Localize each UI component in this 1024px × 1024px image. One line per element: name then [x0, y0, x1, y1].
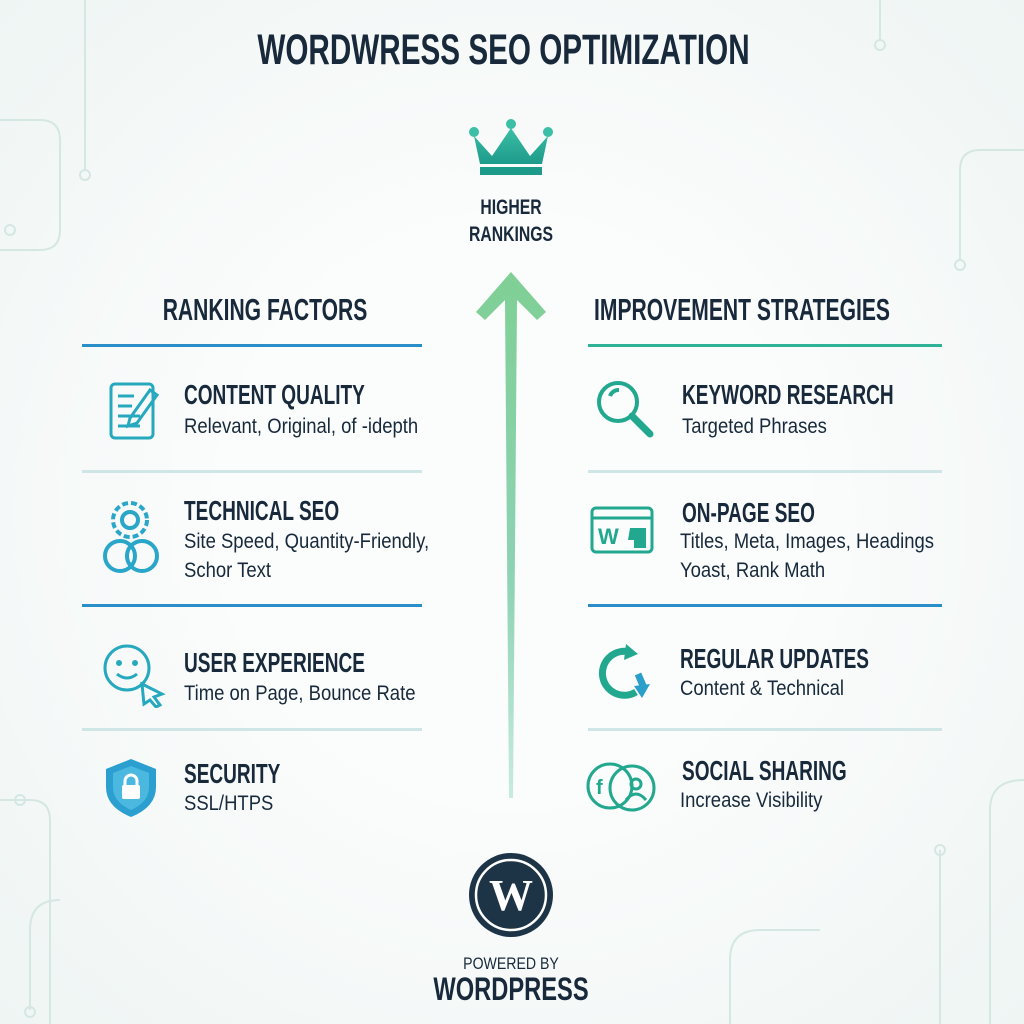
item: user experience: USER EXPERIENCE: [184, 647, 365, 678]
item: content quality: Relevant, Original, of -idepth: [184, 415, 418, 438]
icon: browser W: W: [598, 524, 619, 549]
item: social sharing: Increase Visibility: [680, 789, 822, 812]
item: on-page seo: [590, 497, 934, 582]
item: social sharing: [586, 755, 847, 812]
icon: shield lock: [106, 759, 156, 817]
footer text: [433, 954, 589, 1007]
icon: document pencil: [110, 382, 159, 440]
item: regular updates: [598, 643, 869, 700]
icon: social circles: [586, 762, 656, 812]
icon: social circles: f: [596, 777, 603, 799]
item: content quality: CONTENT QUALITY: [184, 379, 365, 410]
item: on-page seo: ON-PAGE SEO: [682, 497, 815, 528]
item: technical seo: [103, 495, 429, 582]
item: keyword research: KEYWORD RESEARCH: [682, 379, 894, 410]
arrow: upward growth: [476, 272, 546, 798]
item: security: SSL/HTPS: [184, 792, 273, 815]
label: higher rankings: RANKINGS: [469, 223, 553, 246]
icon: browser W: [590, 506, 654, 554]
item: content quality: [110, 379, 418, 440]
icon: magnifier: [597, 381, 654, 438]
item: technical seo: Schor Text: [184, 559, 271, 582]
heading: improvement strategies: IMPROVEMENT STRATEGIES: [594, 292, 890, 327]
item: keyword research: Targeted Phrases: [682, 415, 827, 438]
item: keyword research: [597, 379, 894, 438]
item: technical seo: Site Speed, Quantity-Friendly,: [184, 530, 429, 553]
heading: ranking factors: RANKING FACTORS: [163, 292, 367, 327]
icon: refresh arrows: [598, 644, 650, 699]
item: user experience: [104, 644, 415, 708]
icon: crown: [469, 119, 553, 175]
item: user experience: Time on Page, Bounce Rate: [184, 682, 415, 705]
item: technical seo: TECHNICAL SEO: [184, 495, 339, 526]
icon: gear and chain: [103, 501, 159, 573]
item: security: SECURITY: [184, 758, 280, 789]
logo: wordpress: [469, 853, 553, 937]
item: regular updates: REGULAR UPDATES: [680, 643, 869, 674]
item: on-page seo: Titles, Meta, Images, Headings: [680, 530, 934, 553]
label: higher rankings: [469, 196, 553, 246]
title: WORDWRESS SEO OPTIMIZATION: [257, 26, 750, 74]
item: on-page seo: Yoast, Rank Math: [680, 559, 825, 582]
icon: smiley with cursor: [104, 644, 166, 708]
item: regular updates: Content & Technical: [680, 677, 844, 700]
item: security: [106, 758, 280, 817]
label: higher rankings: HIGHER: [480, 196, 542, 219]
footer text: WORDPRESS: [433, 971, 589, 1007]
item: social sharing: SOCIAL SHARING: [682, 755, 847, 786]
footer text: POWERED BY: [463, 954, 559, 973]
logo: wordpress: W: [489, 871, 533, 920]
